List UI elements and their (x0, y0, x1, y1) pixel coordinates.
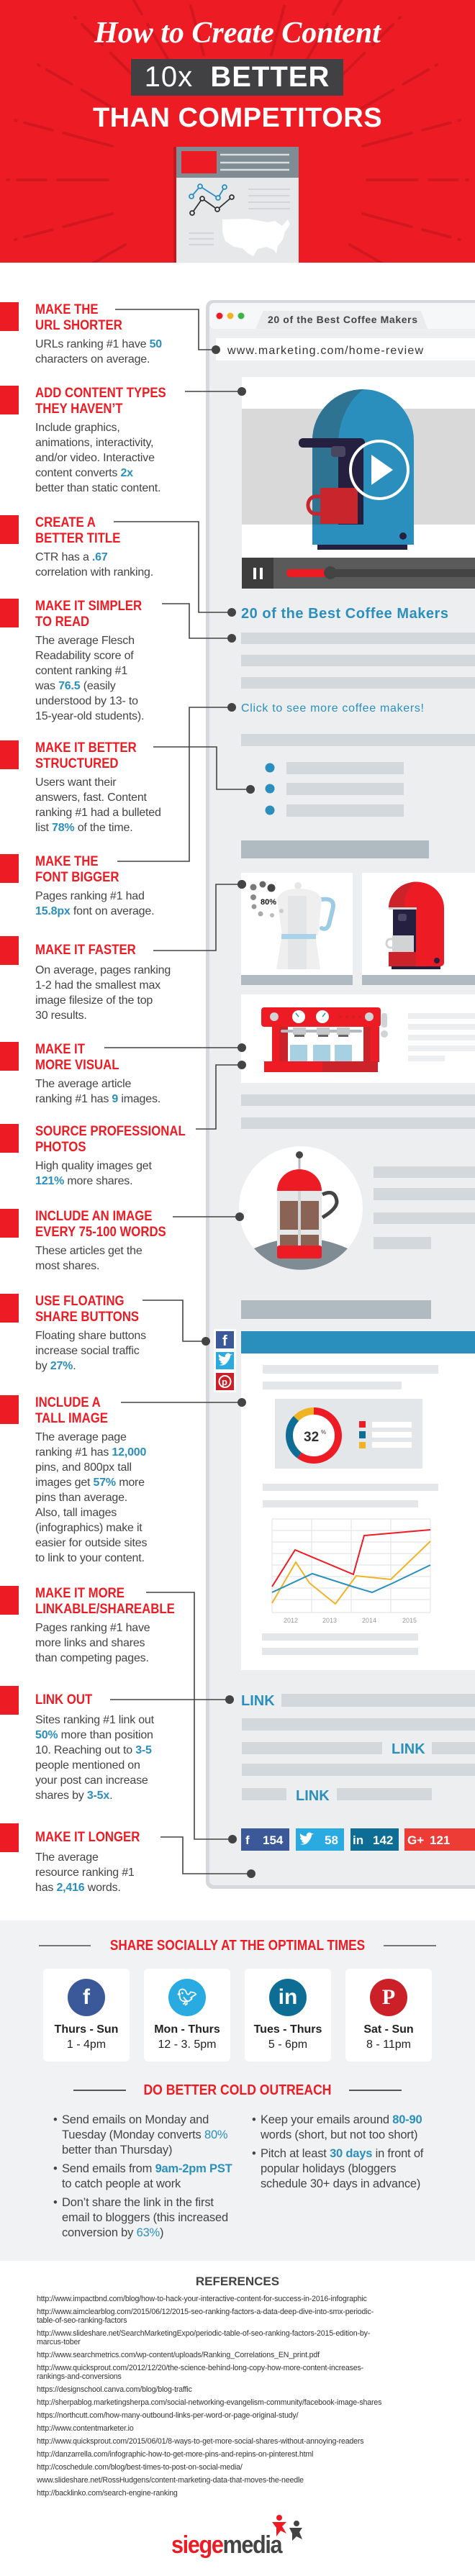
share counts: 58 (325, 1833, 338, 1847)
link rows (241, 1693, 475, 1804)
references list: http://www.aimclearblog.com/2015/06/12/2015-seo-ranking-factors-a-data-deep-dive-into-smx-periodic- (37, 2308, 374, 2316)
line chart: 2014 (362, 1617, 376, 1624)
tip: link out: LINK OUT (35, 1692, 92, 1707)
browser tab: 20 of the Best Coffee Makers (268, 314, 417, 325)
french press image (239, 1146, 363, 1270)
article title: 20 of the Best Coffee Makers (241, 606, 448, 622)
tip: floating share buttons: SHARE BUTTONS (35, 1308, 139, 1324)
tip: faster: 1-2 had the smallest max (35, 979, 160, 992)
tip: better structured: MAKE IT BETTER (35, 740, 137, 756)
tip: more visual: MORE VISUAL (35, 1056, 119, 1072)
tip: tall image: pins than average. (35, 1492, 127, 1504)
tip: faster: On average, pages ranking (35, 964, 171, 976)
title: than competitors: THAN COMPETITORS (93, 103, 382, 133)
link rows: LINK (392, 1741, 425, 1757)
tip: link out: 10. Reaching out to 3-5 (35, 1744, 152, 1756)
share counts: 154 (263, 1833, 284, 1847)
tip: simpler to read: was 76.5 (easily (35, 680, 116, 692)
line chart: 2012 (284, 1617, 298, 1624)
references list: rankings-and-conversions (37, 2372, 122, 2381)
references list: http://backlinko.com/search-engine-ranking (37, 2489, 178, 2498)
line chart: 2015 (402, 1617, 417, 1624)
references list: https://designschool.canva.com/blog/blog-traffic (37, 2385, 192, 2394)
card: twitter times: 🐦︎ (177, 1988, 197, 2006)
tip: linkable: MAKE IT MORE (35, 1585, 125, 1601)
video player with coffee maker (242, 377, 475, 589)
tip: url shorter (0, 301, 162, 366)
icon: document illustration (173, 147, 299, 263)
references list: www.slideshare.net/RossHudgens/content-marketing-data-that-moves-the-needle (37, 2476, 304, 2485)
tip: floating share buttons: Floating share buttons (35, 1330, 146, 1342)
title script: How to Create Content (94, 17, 381, 50)
card: red coffee maker (362, 873, 475, 985)
link rows: LINK (296, 1788, 330, 1804)
browser frame (206, 300, 475, 1889)
share counts: 142 (373, 1833, 393, 1847)
tip: professional photos: High quality images get (35, 1160, 152, 1172)
references list: http://www.contentmarketer.io (37, 2424, 134, 2433)
tip: content types: content converts 2x (35, 467, 133, 479)
tip: simpler to read: Readability score of (35, 650, 134, 662)
url bar (216, 338, 475, 360)
tip: longer: The average (35, 1851, 99, 1864)
outreach tips right (252, 2113, 423, 2190)
tip: longer: MAKE IT LONGER (35, 1829, 140, 1845)
floating share buttons: p (222, 1377, 227, 1387)
tip: faster: image filesize of the top (35, 994, 153, 1006)
tip: tall image: (infographics) make it (35, 1522, 142, 1534)
outreach tips right: Keep your emails around 80-90 words (short, but not too short) (261, 2113, 422, 2141)
tip: font bigger: Pages ranking #1 had (35, 890, 145, 902)
tip: image every 75-100 words: EVERY 75-100 WORDS (35, 1223, 166, 1239)
references list: http://www.quicksprout.com/2012/12/20/the-science-behind-long-copy-how-more-content-increases- (37, 2364, 363, 2372)
tip: floating share buttons: by 27%. (35, 1360, 76, 1372)
tip: content types: THEY HAVEN’T (35, 400, 122, 416)
tip: faster: MAKE IT FASTER (35, 942, 136, 958)
card: facebook times: Thurs - Sun (55, 2023, 118, 2036)
tip: faster (0, 936, 171, 1022)
references list: table-of-seo-ranking-factors (37, 2316, 127, 2325)
share counts: 121 (430, 1833, 450, 1847)
connector lines (104, 309, 255, 1878)
donut chart panel: % (321, 1429, 326, 1436)
tip: url shorter: URL SHORTER (35, 317, 122, 332)
tip: tall image: The average page (35, 1431, 127, 1443)
tip: more visual: The average article (35, 1078, 131, 1090)
tip: longer: resource ranking #1 (35, 1867, 135, 1878)
tip: tall image: ranking #1 has 12,000 (35, 1446, 146, 1459)
tip: simpler to read: TO READ (35, 613, 89, 629)
tip: font bigger: 15.8px font on average. (35, 905, 154, 917)
card: pinterest times (345, 1969, 432, 2062)
tip: link out: 50% more than position (35, 1728, 153, 1741)
tip: faster: 30 results. (35, 1009, 87, 1022)
references list: marcus-tober (37, 2338, 81, 2346)
link: click to see more: Click to see more coffee makers! (241, 702, 424, 715)
references list: http://www.searchmetrics.com/wp-content/uploads/Ranking_Correlations_EN_print.pdf (37, 2351, 320, 2359)
references list: http://danzarrella.com/infographic-how-to-get-more-pins-and-repins-on-pinterest.html (37, 2450, 313, 2459)
card: moka pot with loading (238, 873, 353, 985)
card: pinterest times: P (382, 1985, 395, 2009)
tip: link out: shares by 3-5x. (35, 1789, 112, 1802)
tip: content types: ADD CONTENT TYPES (35, 385, 166, 401)
donut chart panel (275, 1399, 422, 1469)
card: linkedin times: Tues - Thurs (254, 2023, 322, 2036)
card: facebook times: f (83, 1985, 90, 2009)
tip: linkable: Pages ranking #1 have (35, 1622, 150, 1634)
text lines (241, 632, 475, 689)
share counts: G+ (407, 1833, 424, 1847)
tip: font bigger (0, 853, 154, 917)
logo: siegemedia: siegemedia (171, 2531, 281, 2559)
tip: link out: your post can increase (35, 1774, 148, 1786)
tip: better title: CTR has a .67 (35, 551, 108, 563)
tip: professional photos (0, 1123, 186, 1187)
tip: linkable (0, 1585, 175, 1664)
tip: tall image: images get 57% more (35, 1477, 145, 1489)
share counts: f (245, 1833, 250, 1847)
line chart (272, 1519, 430, 1624)
bulleted list (265, 762, 404, 817)
references list: http://sherpablog.marketingsherpa.com/social-networking-evangelism-community/facebook-image-shares (37, 2398, 381, 2407)
card: linkedin times: 5 - 6pm (268, 2038, 307, 2051)
tip: simpler to read: content ranking #1 (35, 665, 127, 677)
tip: image every 75-100 words: These articles get the (35, 1245, 142, 1257)
card: linkedin times: in (279, 1985, 297, 2009)
tip: better structured: list 78% of the time. (35, 822, 132, 834)
floating share buttons: f (222, 1333, 227, 1349)
tip: better title: BETTER TITLE (35, 530, 120, 545)
references list (37, 2295, 381, 2498)
outreach tips right: Pitch at least 30 days in front of popular holidays (bloggers schedule 30+ days in advance) (261, 2147, 423, 2190)
tip: tall image (0, 1394, 147, 1564)
tip: floating share buttons: increase social traffic (35, 1345, 140, 1357)
donut chart panel: 32 (304, 1430, 319, 1445)
tip: more visual: MAKE IT (35, 1041, 85, 1057)
browser mockup (206, 300, 475, 1889)
tip: better title: correlation with ranking. (35, 566, 153, 579)
tip: better structured: Users want their (35, 776, 116, 789)
tip: tall image: to link to your content. (35, 1552, 145, 1564)
tip: url shorter: characters on average. (35, 353, 150, 366)
card: pinterest times: Sat - Sun (363, 2023, 414, 2036)
tip: content types: animations, interactivity, (35, 437, 153, 449)
logo: siegemedia (171, 2515, 302, 2559)
tip: simpler to read: understood by 13- to (35, 695, 138, 707)
tip: content types: Include graphics, (35, 422, 120, 434)
tip: professional photos: SOURCE PROFESSIONAL (35, 1123, 186, 1139)
tip: better structured: answers, fast. Content (35, 792, 147, 804)
tip: simpler to read (0, 598, 144, 722)
url bar: www.marketing.com/home-review (227, 345, 423, 357)
browser tab (216, 311, 428, 329)
tip: font bigger: FONT BIGGER (35, 869, 119, 885)
card: twitter times: 12 - 3. 5pm (158, 2038, 216, 2051)
tip: more visual (0, 1041, 160, 1105)
references list: https://northcutt.com/how-many-outbound-links-per-word-or-page-original-study/ (37, 2411, 298, 2420)
card: espresso machine (241, 994, 475, 1083)
share counts (241, 1828, 475, 1851)
card: twitter times: Mon - Thurs (154, 2023, 220, 2036)
link rows: LINK (241, 1693, 275, 1709)
white content card with charts (241, 1353, 475, 1670)
tip: better structured (0, 740, 161, 834)
heading: share socially: SHARE SOCIALLY AT THE OPTIMAL TIMES (110, 1938, 365, 1954)
card: pinterest times: 8 - 11pm (366, 2038, 411, 2051)
tip: floating share buttons: USE FLOATING (35, 1293, 125, 1309)
tip: linkable: than competing pages. (35, 1652, 149, 1664)
tip: better title (0, 514, 153, 579)
tip: image every 75-100 words: most shares. (35, 1260, 99, 1272)
card: facebook times: 1 - 4pm (67, 2038, 106, 2051)
references heading: REFERENCES (196, 2275, 279, 2288)
tip: content types: and/or video. Interactive (35, 452, 155, 464)
tip: image every 75-100 words (0, 1208, 166, 1272)
card: twitter times (144, 1969, 230, 2062)
card: linkedin times (245, 1969, 331, 2062)
panel: social and outreach (0, 1920, 475, 2261)
tip: professional photos: 121% more shares. (35, 1175, 132, 1187)
line chart: 2013 (322, 1617, 337, 1624)
outreach tips left: Don’t share the link in the first email to bloggers (this increased conversion by 63%) (62, 2196, 228, 2239)
tip: more visual: ranking #1 has 9 images. (35, 1093, 160, 1105)
outreach tips left: Send emails on Monday and Tuesday (Monday converts 80% better than Thursday) (62, 2113, 227, 2157)
references list: http://www.slideshare.net/SearchMarketingExpo/periodic-table-of-seo-ranking-factors-2015-edition-by- (37, 2329, 370, 2338)
references list: http://www.impactbnd.com/blog/how-to-hack-your-interactive-content-for-success-in-2016-infographic (37, 2295, 367, 2303)
references list: http://www.quicksprout.com/2015/06/01/8-ways-to-get-more-social-shares-without-annoying-readers (37, 2437, 363, 2446)
tip: linkable: LINKABLE/SHAREABLE (35, 1600, 175, 1616)
title box: 10x better: 10x BETTER (145, 61, 330, 93)
share counts: in (353, 1833, 363, 1847)
card: facebook times (43, 1969, 130, 2062)
tip: url shorter: MAKE THE (35, 301, 99, 317)
tip: content types: better than static content. (35, 482, 160, 494)
outreach tips left (53, 2113, 232, 2239)
tip: simpler to read: 15-year-old students). (35, 710, 144, 722)
tip: tall image: easier for outside sites (35, 1537, 147, 1549)
tip: image every 75-100 words: INCLUDE AN IMAGE (35, 1208, 152, 1224)
tip: better structured: STRUCTURED (35, 756, 119, 771)
tip: link out: Sites ranking #1 link out (35, 1714, 154, 1725)
tip: tall image: pins, and 800px tall (35, 1461, 132, 1474)
tip: tall image: TALL IMAGE (35, 1410, 108, 1426)
tip: simpler to read: MAKE IT SIMPLER (35, 598, 142, 614)
card: moka pot with loading: 80% (261, 898, 276, 907)
heading: cold outreach: DO BETTER COLD OUTREACH (143, 2082, 332, 2098)
header (0, 0, 475, 263)
tip: simpler to read: The average Flesch (35, 635, 135, 647)
tip: tall image: Also, tall images (35, 1507, 117, 1519)
tip: longer: has 2,416 words. (35, 1881, 121, 1894)
tip: professional photos: PHOTOS (35, 1138, 86, 1154)
tip: font bigger: MAKE THE (35, 853, 99, 869)
floating share buttons (214, 1329, 236, 1392)
tip: link out (0, 1686, 154, 1802)
tip: url shorter: URLs ranking #1 have 50 (35, 338, 162, 350)
tip: tall image: INCLUDE A (35, 1394, 101, 1410)
tip: floating share buttons (0, 1293, 146, 1372)
tip: link out: people mentioned on (35, 1759, 140, 1772)
tip: better title: CREATE A (35, 514, 96, 530)
tip: longer (0, 1823, 140, 1894)
references list: http://coschedule.com/blog/best-times-to-post-on-social-media/ (37, 2463, 243, 2472)
tip: linkable: more links and shares (35, 1637, 145, 1649)
tip: content types (0, 385, 166, 494)
tip: better structured: ranking #1 had a bulleted (35, 807, 161, 819)
outreach tips left: Send emails from 9am-2pm PST to catch people at work (62, 2162, 232, 2190)
